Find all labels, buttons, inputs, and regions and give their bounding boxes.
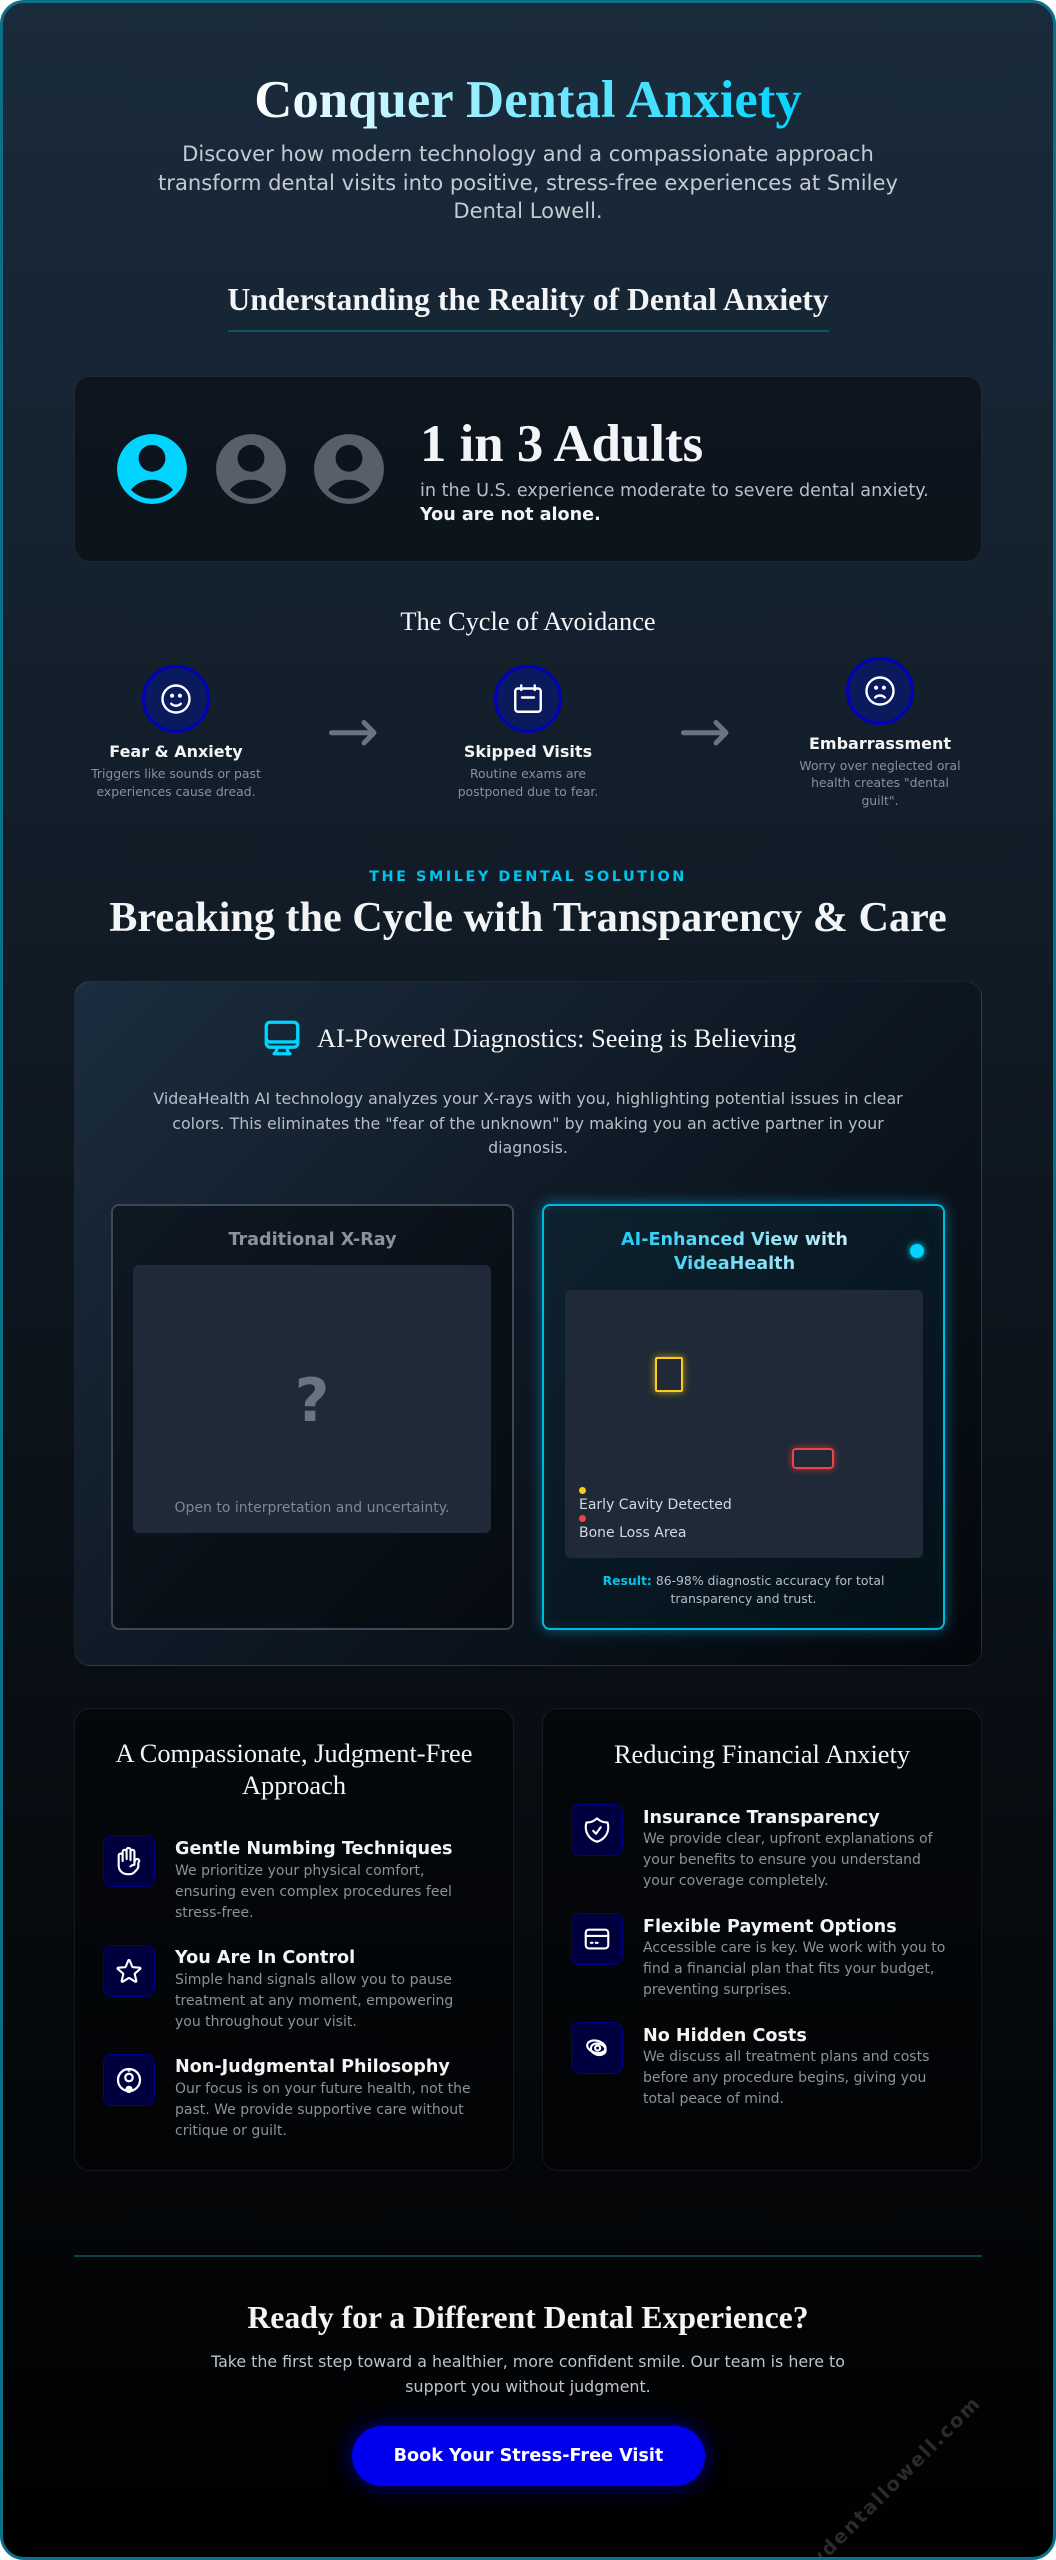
- panel heading: AI-Powered Diagnostics: Seeing is Believing: [317, 1023, 796, 1053]
- icon: person highlighted: [117, 434, 187, 504]
- image placeholder: [133, 1265, 491, 1533]
- item description: [175, 1863, 452, 1921]
- pulse indicator: [910, 1244, 924, 1258]
- step description: [91, 766, 261, 799]
- item description: We discuss all treatment plans and costs: [643, 2049, 929, 2065]
- icon: calendar: [494, 665, 562, 733]
- item description: stress-free.: [175, 1905, 254, 1921]
- heading: cycle of avoidance: The Cycle of Avoidance: [400, 606, 656, 636]
- item description: We prioritize your physical comfort,: [175, 1863, 424, 1879]
- step label: Skipped Visits: [464, 742, 592, 761]
- stat description: in the U.S. experience moderate to severe dental anxiety.: [420, 480, 929, 500]
- card title: [621, 1230, 848, 1274]
- step description: postponed due to fear.: [458, 784, 598, 799]
- item title: Non-Judgmental Philosophy: [175, 2057, 450, 2077]
- call to action text: support you without judgment.: [405, 2376, 651, 2396]
- item description: treatment at any moment, empowering: [175, 1993, 453, 2009]
- icon: credit card: [571, 1913, 623, 1965]
- subtitle: Discover how modern technology and a compassionate approach: [182, 141, 874, 166]
- arrow: step one to two: [329, 720, 376, 746]
- legend dot: red: [579, 1515, 586, 1522]
- stat number: 1 in 3 Adults: [420, 415, 703, 473]
- item description: your benefits to ensure you understand: [643, 1852, 921, 1868]
- stat description: [420, 480, 929, 525]
- icon: shield: [571, 1804, 623, 1856]
- item title: No Hidden Costs: [643, 2026, 807, 2046]
- subtitle: transform dental visits into positive, stress-free experiences at Smiley: [158, 170, 898, 195]
- step label: Fear & Anxiety: [109, 742, 243, 761]
- icon: person grey: [216, 434, 286, 504]
- button: book visit: [352, 2426, 705, 2486]
- panel heading: A Compassionate, Judgment-Free: [116, 1738, 472, 1768]
- icon: smile: [142, 665, 210, 733]
- panel paragraph: colors. This eliminates the "fear of the unknown" by making you an active partner in your: [172, 1114, 884, 1133]
- item description: [643, 2049, 929, 2107]
- panel heading: [116, 1738, 472, 1800]
- panel heading: Reducing Financial Anxiety: [614, 1739, 910, 1769]
- item title: Gentle Numbing Techniques: [175, 1839, 452, 1859]
- card: AI-enhanced view: [542, 1204, 945, 1630]
- card: traditional x-ray: [111, 1204, 514, 1630]
- eyebrow: solution: THE SMILEY DENTAL SOLUTION: [369, 869, 687, 885]
- panel: AI diagnostics: [74, 981, 982, 1666]
- panel paragraph: VideaHealth AI technology analyzes your X-rays with you, highlighting potential issues in clear: [153, 1089, 903, 1108]
- item description: past. We provide supportive care without: [175, 2102, 464, 2118]
- panel: statistic: [74, 376, 982, 562]
- stat description: You are not alone.: [420, 505, 601, 525]
- step description: health creates "dental: [811, 775, 949, 790]
- panel paragraph: [153, 1089, 903, 1157]
- legend label: bone loss: Bone Loss Area: [579, 1525, 686, 1541]
- section heading: understanding: Understanding the Reality of Dental Anxiety: [227, 282, 829, 316]
- item title: You Are In Control: [175, 1948, 355, 1968]
- item description: [175, 1972, 453, 2030]
- step description: Worry over neglected oral: [799, 758, 961, 772]
- image with detections: [565, 1290, 923, 1558]
- button: book visit: Book Your Stress-Free Visit: [394, 2446, 663, 2466]
- result caption: Result: 86-98% diagnostic accuracy for total: [603, 1573, 884, 1588]
- item description: total peace of mind.: [643, 2091, 784, 2107]
- legend label: cavity: Early Cavity Detected: [579, 1497, 732, 1513]
- item description: preventing surprises.: [643, 1982, 791, 1998]
- result caption: [603, 1573, 884, 1606]
- step description: [458, 766, 598, 799]
- item description: ensuring even complex procedures feel: [175, 1884, 452, 1900]
- item description: [643, 1831, 933, 1889]
- cycle step: embarrassment: [799, 657, 961, 808]
- icon: monitor: [264, 1020, 300, 1056]
- step description: experiences cause dread.: [96, 784, 256, 799]
- icon: non-judgmental: [103, 2054, 155, 2106]
- legend: [579, 1487, 732, 1541]
- icon: star: [103, 1945, 155, 1997]
- item description: find a financial plan that fits your budget,: [643, 1961, 934, 1977]
- step description: Routine exams are: [470, 766, 586, 781]
- detection: bone loss: [792, 1448, 834, 1469]
- item description: you throughout your visit.: [175, 2014, 357, 2030]
- subtitle: [158, 141, 898, 223]
- item description: critique or guilt.: [175, 2123, 287, 2139]
- item title: Flexible Payment Options: [643, 1917, 897, 1937]
- item description: your coverage completely.: [643, 1873, 828, 1889]
- item description: [643, 1940, 945, 1998]
- result caption: transparency and trust.: [670, 1591, 816, 1606]
- icon: hand: [103, 1835, 155, 1887]
- legend dot: yellow: [579, 1487, 586, 1494]
- call to action heading: Ready for a Different Dental Experience?: [247, 2300, 809, 2334]
- step description: guilt".: [861, 793, 899, 808]
- cycle step: skipped visits: [458, 665, 598, 799]
- step label: Embarrassment: [809, 734, 951, 752]
- cycle step: fear and anxiety: [91, 665, 261, 799]
- panel: financial anxiety: [542, 1708, 982, 2171]
- call to action text: [211, 2352, 845, 2396]
- detection: cavity: [655, 1357, 683, 1392]
- call to action text: Take the first step toward a healthier, more confident smile. Our team is here to: [211, 2352, 845, 2370]
- item description: [175, 2081, 471, 2139]
- card title: AI-Enhanced View with: [621, 1230, 848, 1250]
- item description: Accessible care is key. We work with you to: [643, 1940, 945, 1956]
- section heading: breaking the cycle: Breaking the Cycle with Transparency & Care: [109, 894, 947, 941]
- item description: Simple hand signals allow you to pause: [175, 1972, 452, 1988]
- card title: Traditional X-Ray: [228, 1230, 397, 1250]
- step description: [799, 758, 961, 808]
- title: Conquer Dental Anxiety: [254, 71, 802, 129]
- subtitle: Dental Lowell.: [453, 198, 603, 223]
- panel: compassionate approach: [74, 1708, 514, 2171]
- panel heading: Approach: [242, 1770, 346, 1800]
- panel paragraph: diagnosis.: [488, 1138, 568, 1157]
- step description: Triggers like sounds or past: [91, 766, 261, 781]
- item description: before any procedure begins, giving you: [643, 2070, 926, 2086]
- item description: Our focus is on your future health, not the: [175, 2081, 471, 2097]
- caption: Open to interpretation and uncertainty.: [175, 1500, 449, 1516]
- item description: We provide clear, upfront explanations of: [643, 1831, 933, 1847]
- question mark: ?: [295, 1366, 329, 1436]
- icon: no hidden costs: [571, 2022, 623, 2074]
- card title: VideaHealth: [674, 1254, 795, 1274]
- icon: person grey second: [314, 434, 384, 504]
- icon: frown: [846, 656, 914, 724]
- arrow: step two to three: [681, 720, 728, 746]
- item title: Insurance Transparency: [643, 1808, 880, 1828]
